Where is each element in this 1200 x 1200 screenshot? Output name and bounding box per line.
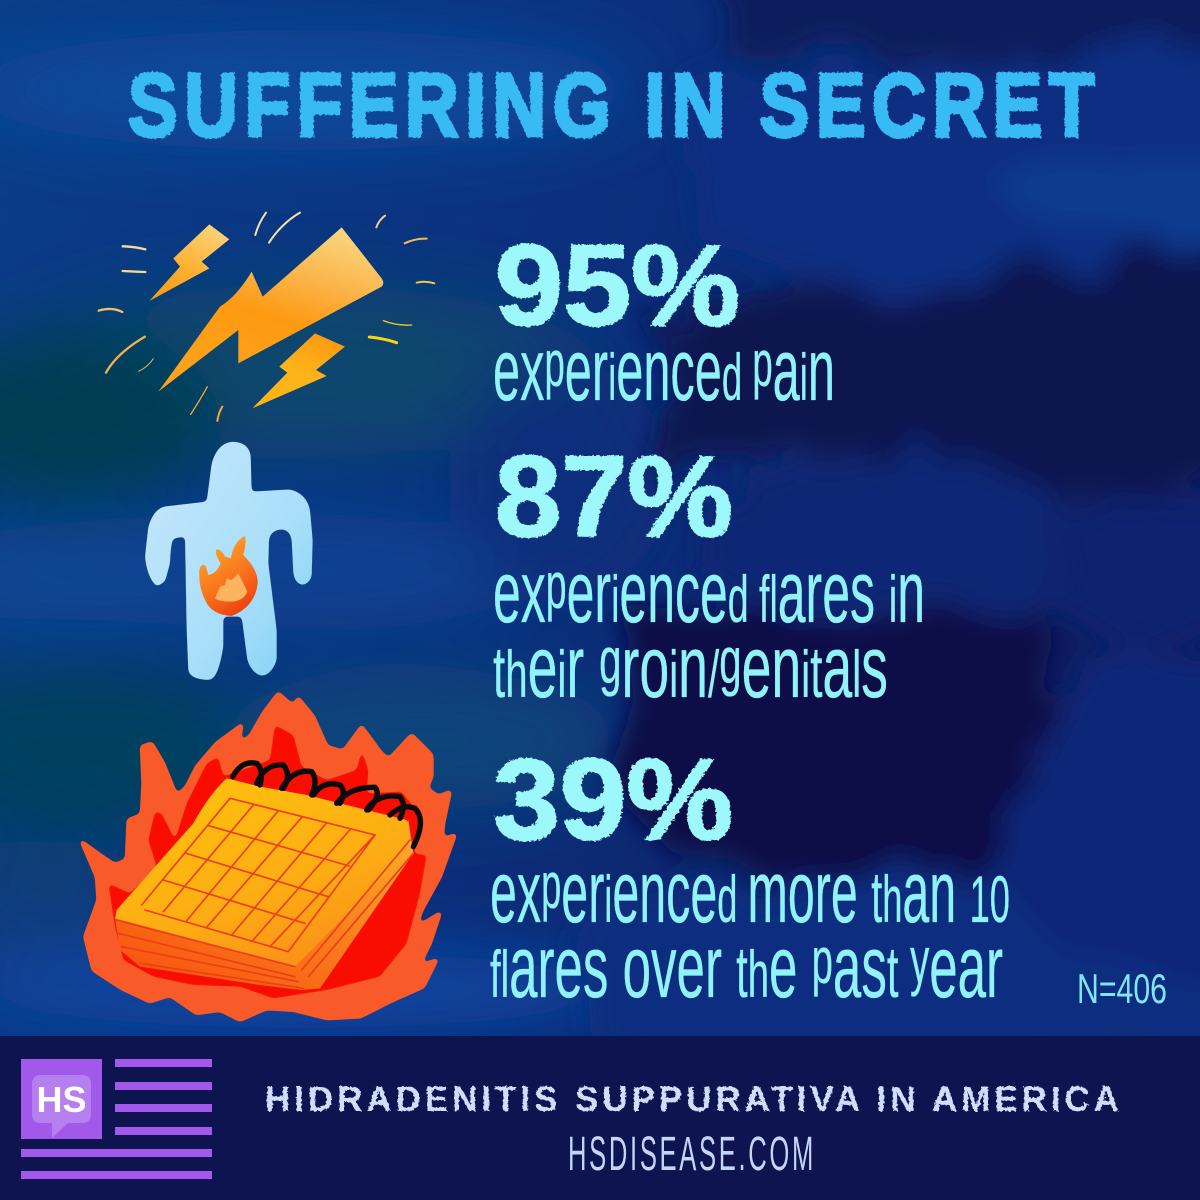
icon: body with flame [145, 442, 313, 680]
outer flame [82, 693, 455, 1020]
caption: in [800, 320, 857, 419]
stat: 87 percent: in/ [669, 617, 727, 716]
footer url: HSDISEASE.COM [568, 1128, 816, 1181]
footer band [0, 1036, 1200, 1200]
stat: 39 percent: p [812, 923, 833, 997]
logo: HS flag: HS [36, 1079, 87, 1120]
calendar side pages [115, 820, 413, 990]
caption: e [567, 542, 594, 641]
stat: 39 percent: ear [929, 917, 1003, 1016]
stat: 87 percent: g [599, 623, 622, 697]
caption: rienced more than 10 [588, 842, 1043, 941]
logo: HS flag [21, 1059, 212, 1179]
caption: e [561, 842, 588, 941]
caption: rienced [592, 320, 807, 419]
caption: a [773, 320, 800, 419]
inner flame [108, 725, 427, 998]
stat: 87 percent: their [493, 617, 596, 716]
calendar top page [115, 778, 407, 967]
stat: 39 percent: t [887, 933, 910, 1013]
number: 87% [495, 433, 733, 561]
calendar rings [233, 763, 420, 847]
icon: lightning bolts [99, 213, 434, 421]
stat: 87 percent: itals [801, 617, 905, 716]
stat: 87 percent [493, 433, 925, 716]
calendar grid [116, 798, 413, 988]
caption: p [541, 848, 561, 922]
stat: 39 percent: as [833, 917, 887, 1016]
caption: p [752, 326, 773, 400]
caption: ex [490, 842, 583, 941]
number: 39% [493, 736, 733, 864]
caption: e [565, 320, 592, 419]
caption: ex [493, 542, 586, 641]
caption: p [546, 548, 567, 622]
stat: 39 percent: y [910, 923, 929, 997]
number: 95% [495, 222, 740, 350]
sample size note: N=406 [1077, 965, 1167, 1012]
caption: p [544, 326, 565, 400]
stat: 87 percent: ro [622, 617, 669, 716]
stat: 39 percent [490, 736, 1010, 1016]
stat: 95 percent [493, 222, 835, 419]
stat: 87 percent: g [719, 623, 742, 697]
icon: calendar on fire [82, 693, 455, 1020]
caption: ex [493, 320, 586, 419]
stat: 87 percent: en [742, 617, 801, 716]
stat: 39 percent: flares over the [490, 917, 876, 1016]
footer title: HIDRADENITIS SUPPURATIVA IN AMERICA [265, 1080, 1123, 1119]
caption: rienced flares in [594, 542, 949, 641]
